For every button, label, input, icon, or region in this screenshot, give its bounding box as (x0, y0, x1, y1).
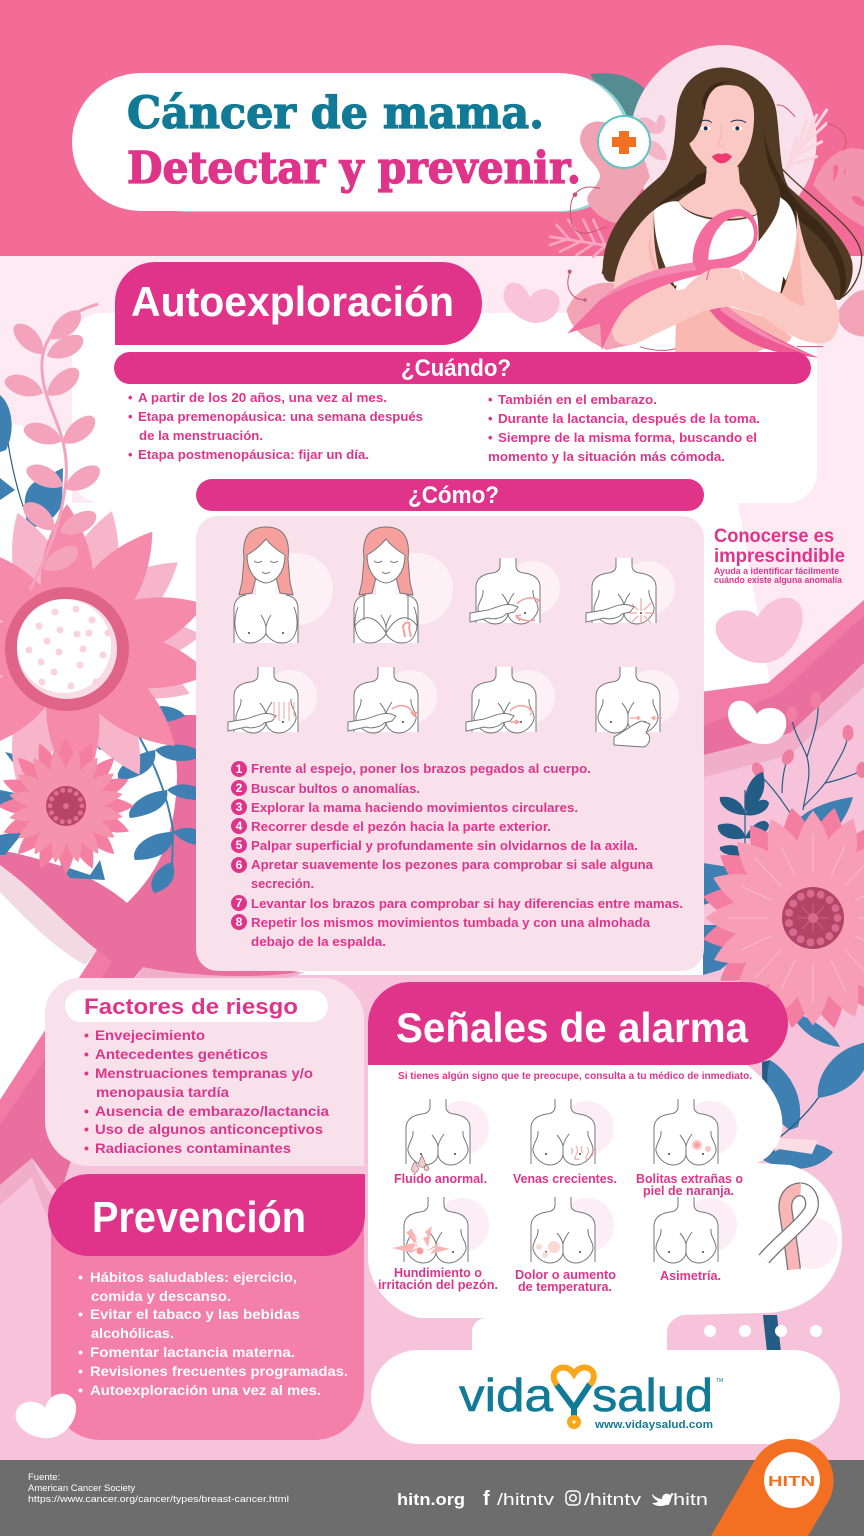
text: cuándo, left column: Etapa postmenopáusica: fijar un día. (138, 447, 369, 462)
heart, top (503, 283, 560, 323)
heading: ¿Cómo? (196, 479, 704, 511)
step numbers and text: Buscar bultos o anomalías. (251, 781, 420, 796)
list: prevention: • (78, 1382, 83, 1398)
logo panel: VidaySalud (371, 1350, 840, 1444)
heading: Señales de alarma: Señales de alarma (396, 1004, 749, 1051)
step numbers and text: 8 (236, 915, 243, 929)
list: prevention: • (78, 1306, 83, 1322)
list: prevention: alcohólicas. (91, 1325, 174, 1341)
text: cuándo, right column: Durante la lactancia, después de la toma. (498, 411, 760, 426)
label: Fluido anormal: Fluido anormal. (394, 1172, 487, 1186)
step numbers and text: Frente al espejo, poner los brazos pegados al cuerpo. (251, 761, 591, 776)
text: cuándo, right column: • (488, 411, 493, 426)
step numbers and text: Recorrer desde el pezón hacia la parte exterior. (251, 819, 551, 834)
heart, bottom left (16, 1394, 76, 1438)
list: prevention: • (78, 1344, 83, 1360)
list: risk factors: Ausencia de embarazo/lactancia (95, 1103, 329, 1119)
social links: hitn.org (397, 1490, 465, 1509)
text: cuándo, left column (128, 390, 423, 462)
heart, right white (728, 701, 786, 744)
label: Hundimiento (378, 1266, 498, 1292)
list: prevention: Autoexploración una vez al mes. (90, 1382, 321, 1398)
blue leaves, lower right (762, 1043, 864, 1352)
footer (0, 1439, 864, 1536)
list: risk factors: • (84, 1027, 89, 1043)
text: cuándo, right column: • (488, 392, 493, 407)
list: risk factors: • (84, 1121, 89, 1137)
text: cuándo, right column: momento y la situación más cómoda. (488, 449, 725, 464)
social links (397, 1488, 708, 1510)
icon: venas crecientes (531, 1099, 614, 1165)
label: Dolor o temperatura: de temperatura. (518, 1280, 612, 1294)
source text: American Cancer Society (28, 1483, 135, 1494)
text: cuándo, left column: • (128, 390, 133, 405)
icon group: step illustrations (228, 527, 679, 747)
social links: /hitntv (584, 1490, 642, 1509)
list: risk factors: • (84, 1065, 89, 1081)
step numbers and text: 3 (236, 800, 243, 814)
step numbers and text: 4 (236, 819, 243, 833)
text: cuándo, right column: También en el embarazo. (498, 392, 657, 407)
text: cuándo, left column: de la menstruación. (139, 428, 263, 443)
small pink flower, left (0, 738, 134, 874)
social links: /hitntv (497, 1490, 555, 1509)
logo: HITN pin: HITN (768, 1473, 815, 1490)
panel: prevención (48, 1174, 365, 1440)
list: prevention: Evitar el tabaco y las bebidas (90, 1306, 300, 1322)
step numbers and text: 1 (236, 762, 243, 776)
large pink flower, right (699, 804, 864, 1032)
label: Hundimiento: Hundimiento o (394, 1266, 482, 1280)
panel: señales de alarma (368, 982, 842, 1352)
step numbers and text: 5 (236, 838, 243, 852)
logo stethoscope heart (554, 1368, 594, 1429)
text: cuándo, left column: Etapa premenopáusica: una semana después (138, 409, 423, 424)
list: prevention: Fomentar lactancia materna. (90, 1344, 295, 1360)
heading: ¿Cuándo?: ¿Cuándo? (401, 355, 511, 382)
step numbers and text: Apretar suavemente los pezones para comprobar si sale alguna (251, 857, 654, 872)
social links: /hitn (667, 1490, 708, 1509)
step numbers and text: debajo de la espalda. (251, 934, 386, 949)
heart, right pale (716, 598, 803, 663)
list: risk factors: Antecedentes genéticos (95, 1046, 268, 1062)
source text (28, 1472, 289, 1505)
logo wordmark: vida (459, 1369, 553, 1421)
list: risk factors: Uso de algunos anticonceptivos (95, 1121, 323, 1137)
step numbers and text: 7 (236, 896, 243, 910)
list: risk factors: • (84, 1103, 89, 1119)
source text: https://www.cancer.org/cancer/types/breast-cancer.html (28, 1494, 289, 1505)
list: risk factors: menopausia tardía (96, 1084, 229, 1100)
label: Dolor o temperatura (515, 1268, 616, 1294)
label: Hundimiento: irritación del pezón. (378, 1278, 498, 1292)
list: prevention: • (78, 1363, 83, 1379)
heading: Prevención: Prevención (92, 1193, 306, 1242)
label: Bolitas extrañas (636, 1172, 743, 1198)
text: cuándo, left column: A partir de los 20 años, una vez al mes. (138, 390, 387, 405)
text: cuándo, left column: • (128, 447, 133, 462)
text: cuándo, right column: Siempre de la misma forma, buscando el (498, 430, 757, 445)
list: risk factors: • (84, 1140, 89, 1156)
pink sprig, top left (2, 304, 104, 590)
sprigs with buds, right (703, 692, 864, 1047)
heading: ¿Cómo?: ¿Cómo? (408, 482, 499, 509)
icon: bolitas extrañas (654, 1099, 737, 1165)
list: risk factors: Envejecimiento (95, 1027, 205, 1043)
icon: fluido anormal (406, 1099, 489, 1172)
large pink flower, left (0, 503, 214, 796)
step numbers and text: Repetir los mismos movimientos tumbada y con una almohada (251, 915, 651, 930)
source text: Fuente: (28, 1472, 60, 1483)
icon: medical cross badge (598, 116, 650, 168)
text: consult doctor: Si tienes algún signo que te preocupe, consulta a tu médico de inmediato. (398, 1071, 752, 1082)
woman illustration with pink ribbon (550, 45, 864, 358)
title: Cáncer de mama. (127, 88, 544, 139)
callout: Conocerse es imprescindible (714, 526, 845, 585)
icon: dolor o temperatura (531, 1197, 614, 1263)
list: risk factors: • (84, 1046, 89, 1062)
step numbers and text: 2 (236, 781, 243, 795)
pink ribbon backdrop, right (700, 600, 864, 778)
callout: Conocerse es imprescindible: cuándo existe alguna anomalía (714, 575, 843, 585)
label: Dolor o temperatura: Dolor o aumento (515, 1268, 616, 1282)
callout: Conocerse es imprescindible: Conocerse es (714, 526, 834, 547)
title pill with teal backing (72, 73, 650, 212)
text: cuándo, left column: • (128, 409, 133, 424)
list: prevention: • (78, 1269, 83, 1285)
step numbers and text: Explorar la mama haciendo movimientos circulares. (251, 800, 578, 815)
text: cuándo, right column: • (488, 430, 493, 445)
list: risk factors (84, 1027, 329, 1156)
callout: Conocerse es imprescindible: imprescindible (714, 546, 845, 567)
dots (704, 1325, 822, 1337)
title (127, 88, 581, 194)
title: Detectar y prevenir. (127, 143, 581, 194)
step numbers and text: Levantar los brazos para comprobar si hay diferencias entre mamas. (251, 896, 683, 911)
text: cuándo, right column (488, 392, 760, 464)
list: risk factors: Radiaciones contaminantes (95, 1140, 291, 1156)
heading: Factores de riesgo: Factores de riesgo (84, 994, 298, 1019)
logo url: www.vidaysalud.com (594, 1419, 713, 1431)
heading: Autoexploración (115, 262, 482, 345)
logo panel: VidaySalud: TM (716, 1378, 723, 1384)
logo: HITN pin (711, 1439, 834, 1536)
step numbers and text: secreción. (251, 876, 314, 891)
social links: f (483, 1488, 490, 1510)
list: risk factors: Menstruaciones tempranas y/o (95, 1065, 313, 1081)
pink ribbon backdrop, left (0, 715, 305, 1218)
label: Venas crecientes: Venas crecientes. (513, 1172, 617, 1186)
heading: Prevención (48, 1174, 365, 1256)
label: Bolitas extrañas: Bolitas extrañas o (636, 1172, 743, 1186)
panel: steps (196, 516, 704, 971)
callout: Conocerse es imprescindible: Ayuda a identificar fácilmente (714, 566, 839, 576)
list: prevention: comida y descanso. (91, 1288, 231, 1304)
icon: asimetría (654, 1197, 737, 1263)
step numbers and text: 6 (236, 858, 243, 872)
icon: awareness ribbon outline (764, 1189, 838, 1269)
panel: factores de riesgo (45, 978, 364, 1166)
logo wordmark (459, 1369, 713, 1421)
logo wordmark: salud (592, 1369, 713, 1421)
heading: Señales de alarma (368, 982, 788, 1065)
list: prevention: Revisiones frecuentes programadas. (90, 1363, 348, 1379)
icon: hundimiento (392, 1197, 489, 1263)
step numbers and text (231, 761, 683, 949)
list: prevention: Hábitos saludables: ejercicio, (90, 1269, 297, 1285)
heading: ¿Cuándo? (114, 352, 811, 384)
label: Bolitas extrañas: piel de naranja. (643, 1184, 734, 1198)
label: Asimetría: Asimetría. (660, 1269, 721, 1283)
blue leaves, left (0, 395, 205, 893)
list: prevention (78, 1269, 348, 1398)
step numbers and text: Palpar superficial y profundamente sin olvidarnos de la axila. (251, 838, 638, 853)
heading: Autoexploración: Autoexploración (131, 278, 454, 325)
